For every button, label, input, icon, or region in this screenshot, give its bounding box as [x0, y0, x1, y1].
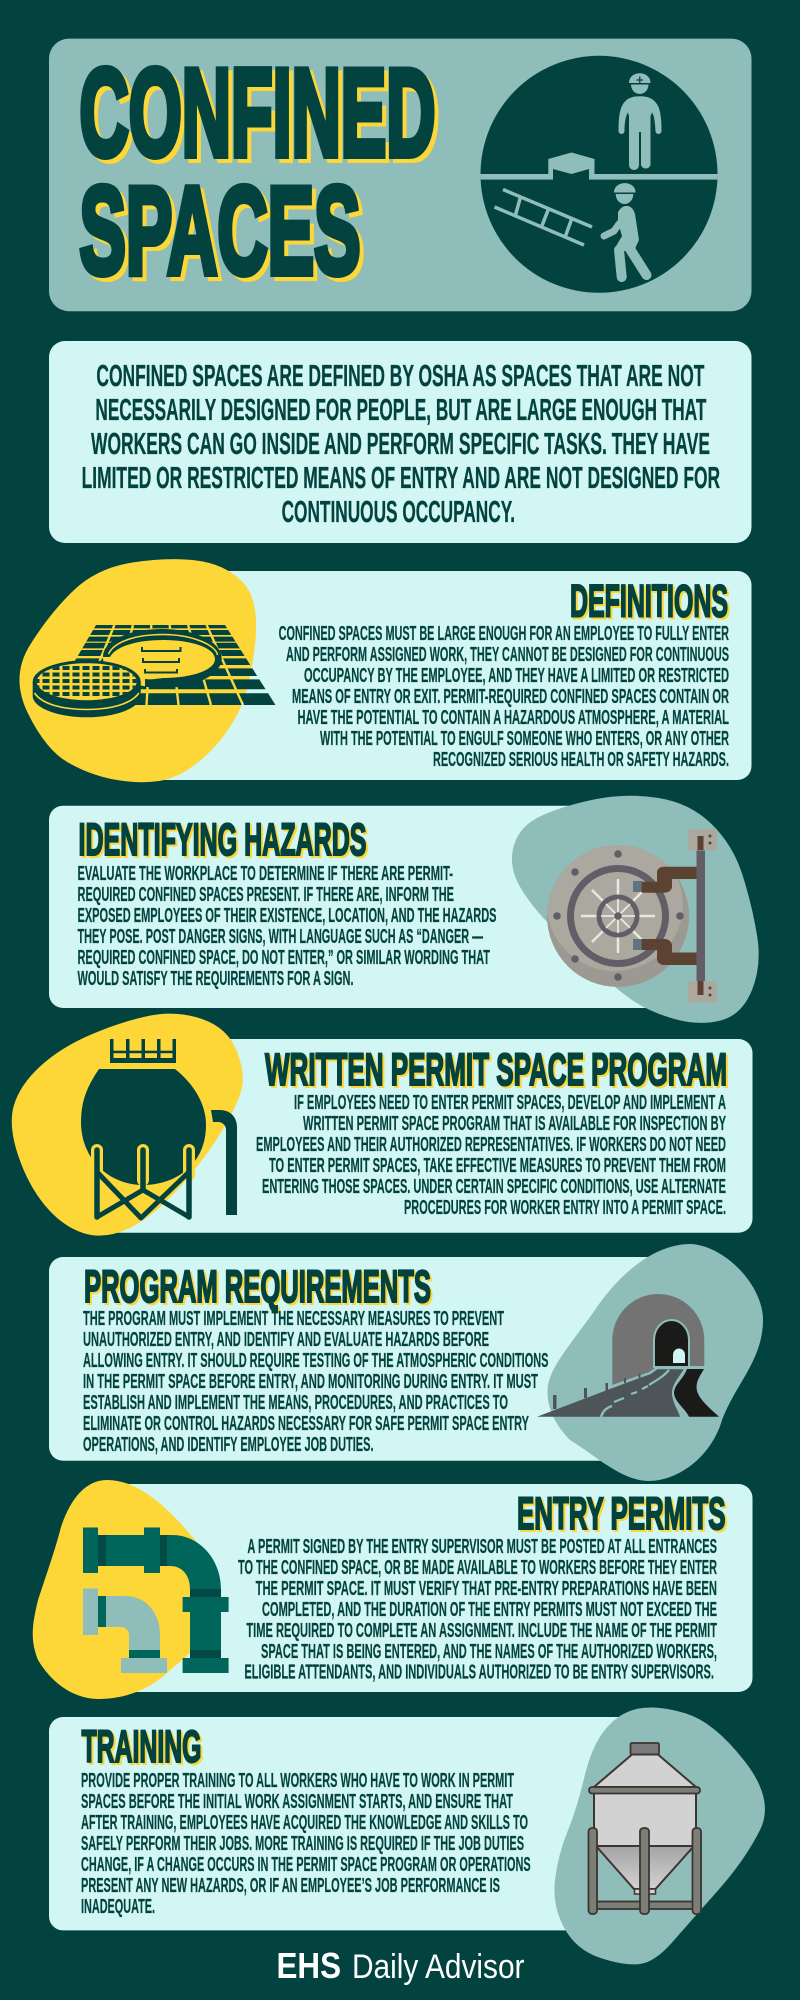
body text — [279, 622, 729, 771]
body text — [238, 1535, 717, 1684]
body text: INADEQUATE. — [81, 1895, 155, 1918]
panel: identifying hazards — [49, 796, 759, 1023]
icon: workers and confined space entry — [480, 56, 719, 293]
body text: REQUIRED CONFINED SPACES PRESENT. IF THERE ARE, INFORM THE — [78, 883, 454, 906]
body text — [256, 1091, 726, 1219]
blob: yellow — [33, 1480, 221, 1699]
panel: entry permits — [33, 1480, 752, 1699]
footer logo: Daily Advisor — [352, 1948, 524, 1986]
panel: written permit space program — [12, 1014, 752, 1236]
title — [80, 44, 436, 300]
blob: yellow — [12, 1014, 243, 1236]
blob: teal — [512, 796, 759, 1023]
panel: introduction — [49, 341, 752, 543]
heading: IDENTIFYING HAZARDS — [78, 814, 366, 865]
panel: definitions — [19, 559, 751, 782]
blob: teal — [547, 1244, 763, 1481]
panel: training — [49, 1707, 765, 1964]
title: CONFINED — [80, 44, 436, 182]
body text: WOULD SATISFY THE REQUIREMENTS FOR A SIGN. — [78, 967, 354, 990]
blob: teal — [554, 1707, 765, 1964]
heading: PROGRAM REQUIREMENTS — [84, 1261, 431, 1312]
title: SPACES — [80, 162, 360, 300]
footer logo — [276, 1945, 524, 1986]
icon: vault door — [547, 829, 717, 1002]
panel: program requirements — [49, 1244, 763, 1481]
intro text: CONTINUOUS OCCUPANCY. — [282, 495, 515, 529]
icon: silo — [588, 1743, 701, 1914]
body text: OPERATIONS, AND IDENTIFY EMPLOYEE JOB DUTIES. — [83, 1433, 374, 1456]
intro text — [82, 359, 720, 529]
icon: pipes — [83, 1528, 229, 1673]
icon: storage tank — [81, 1039, 237, 1218]
footer logo: EHS — [276, 1945, 341, 1986]
panel: title banner — [49, 39, 752, 311]
heading: TRAINING — [82, 1721, 202, 1772]
blob: yellow — [19, 559, 256, 782]
body text — [83, 1307, 548, 1456]
icon: manhole cover and opening — [30, 625, 276, 717]
body text: EVALUATE THE WORKPLACE TO DETERMINE IF THERE ARE PERMIT- — [78, 862, 453, 885]
body text — [81, 1769, 531, 1918]
icon: tunnel and road — [537, 1294, 719, 1417]
body text — [78, 862, 496, 990]
